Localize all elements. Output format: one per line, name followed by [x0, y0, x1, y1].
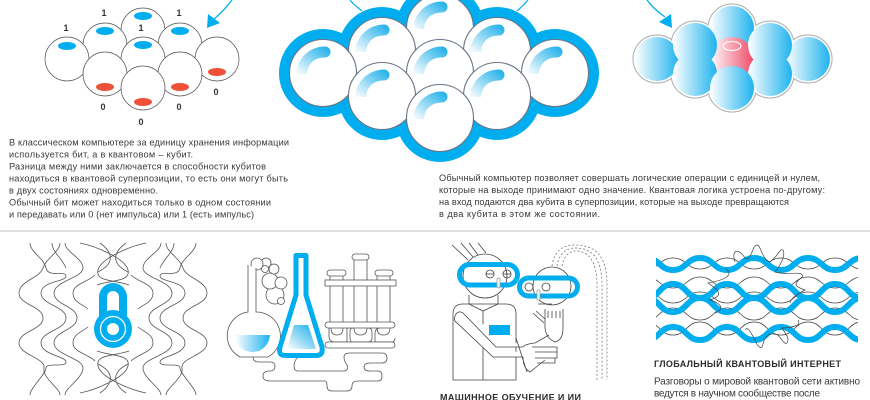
text block: quantum logic: на вход подаются два кубита в суперпозиции, которые на выходе превращаются	[439, 197, 789, 207]
illustration: chemistry lab	[227, 254, 396, 391]
text block: bit versus qubit: Разница между ними заключается в способности кубитов	[9, 161, 266, 171]
arrow: center right	[517, 0, 528, 11]
text block: quantum internet description: ведутся в научном сообществе после	[654, 387, 820, 399]
illustration: global quantum network	[646, 245, 862, 347]
pipe	[253, 353, 387, 391]
text block: bit versus qubit	[9, 137, 289, 220]
text block: bit versus qubit: Обычный бит может находиться только в одном состоянии	[9, 197, 271, 207]
text block: quantum logic: которые на выходе принимают одно значение. Квантовая логика устроена по-другому:	[439, 185, 825, 195]
panel: classic bits: 1	[138, 23, 144, 33]
heading: global quantum internet: ГЛОБАЛЬНЫЙ КВАНТОВЫЙ ИНТЕРНЕТ	[654, 358, 842, 369]
text block: bit versus qubit: и передавать или 0 (нет импульса) или 1 (есть импульс)	[9, 210, 254, 220]
text block: quantum logic: Обычный компьютер позволяет совершать логические операции с единицей и нулем,	[439, 173, 820, 183]
panel: qubit bubble cloud	[279, 0, 599, 162]
panel: classic bits: 1	[63, 23, 69, 33]
illustration: robots machine learning	[452, 243, 607, 380]
small robot	[520, 267, 578, 342]
icon: padlock	[94, 283, 132, 348]
text block: quantum logic	[439, 173, 825, 219]
text block: bit versus qubit: в двух состояниях одновременно.	[9, 185, 158, 195]
panel: classic bits: 0	[100, 102, 106, 112]
dashed signals	[552, 245, 607, 380]
panel: classic bits: 1	[101, 8, 107, 18]
round flask	[227, 265, 280, 357]
panel: classic bits: 0	[138, 117, 144, 127]
test tube rack	[325, 254, 396, 348]
illustration: encrypted lock with waves	[19, 243, 207, 395]
big robot	[452, 243, 557, 380]
text block: bit versus qubit: В классическом компьютере за единицу хранения информации	[9, 137, 289, 147]
panel: classic bits	[45, 8, 239, 127]
text block: quantum logic: в два кубита в этом же состоянии.	[439, 209, 600, 219]
panel: classic bits: 1	[176, 8, 182, 18]
arrow: to classic bits	[207, 0, 232, 28]
text block: bit versus qubit: используется бит, а в квантовом – кубит.	[9, 149, 193, 159]
conical flask	[280, 256, 322, 356]
panel: classic bits: 0	[176, 102, 182, 112]
arrow: center left	[350, 0, 362, 11]
arrow: to entangled cluster	[647, 0, 672, 28]
text block: quantum internet description: Разговоры о мировой квантовой сети активно	[654, 376, 860, 387]
text block: quantum internet description	[654, 376, 860, 399]
panel: entangled qubits cluster	[633, 4, 832, 112]
text block: bit versus qubit: находиться в квантовой суперпозиции, то есть они могут быть	[9, 173, 288, 183]
panel: classic bits: 0	[213, 87, 219, 97]
